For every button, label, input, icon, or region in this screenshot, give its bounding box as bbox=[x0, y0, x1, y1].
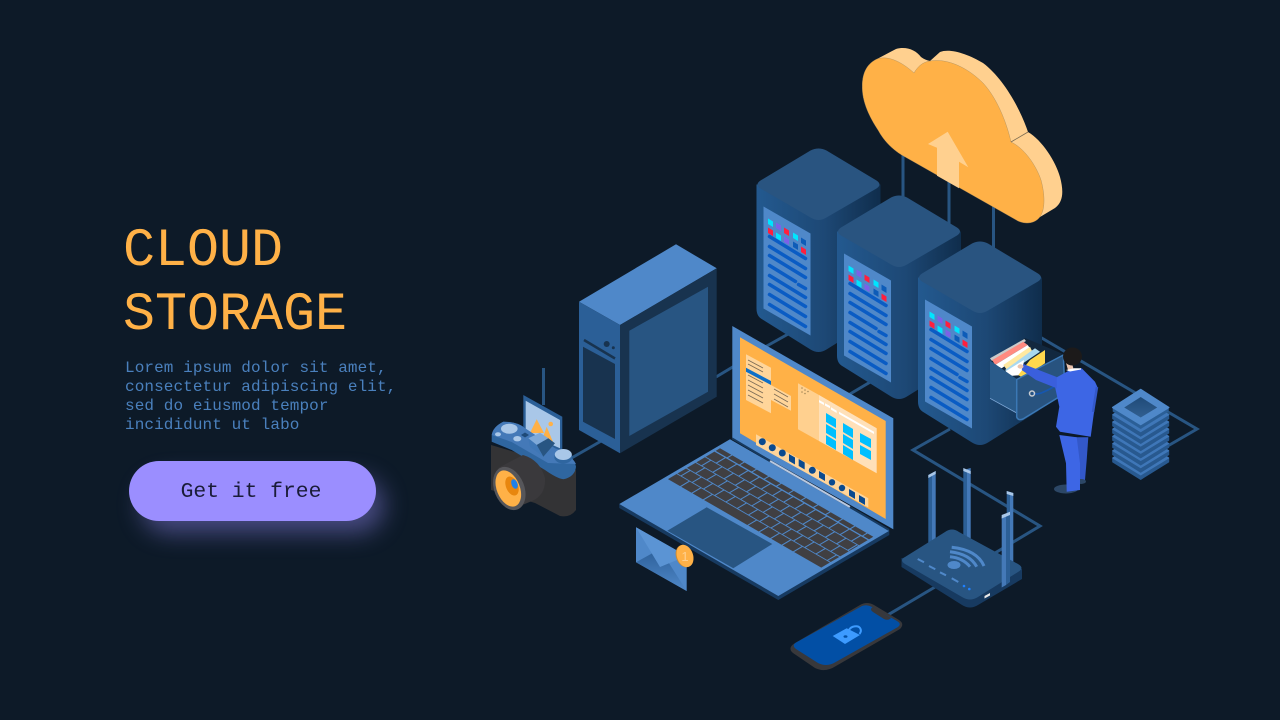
server rack 1 bbox=[756, 148, 880, 352]
camera with photo bbox=[487, 395, 576, 516]
router antenna front bbox=[1002, 512, 1010, 588]
smartphone with lock bbox=[790, 603, 902, 670]
file drawer bbox=[990, 338, 1065, 420]
wifi router bbox=[902, 468, 1022, 608]
lock icon bbox=[833, 626, 861, 644]
camera prism bbox=[528, 433, 555, 457]
call to action button bbox=[129, 461, 376, 521]
title: STORAGE bbox=[123, 286, 347, 346]
description text: consectetur adipiscing elit, bbox=[125, 378, 396, 396]
server rack 2 bbox=[837, 196, 961, 399]
laptop lid and screen bbox=[732, 326, 893, 529]
laptop base bbox=[619, 438, 889, 600]
keyboard bbox=[672, 450, 871, 565]
businessman bbox=[1018, 348, 1097, 494]
description text: sed do eiusmod tempor bbox=[125, 397, 329, 415]
desktop tower bbox=[579, 244, 717, 453]
call to action button: Get it free bbox=[181, 480, 321, 504]
description text bbox=[125, 358, 396, 434]
router antennas back bbox=[928, 468, 1013, 562]
connection lines bbox=[544, 150, 1197, 616]
disk stack bbox=[1113, 390, 1169, 479]
upload arrow bbox=[928, 132, 968, 188]
title: CLOUD bbox=[123, 222, 283, 282]
lens bbox=[487, 455, 545, 515]
description text: Lorem ipsum dolor sit amet, bbox=[125, 358, 387, 376]
description text: incididunt ut labo bbox=[125, 416, 299, 434]
server rack 3 bbox=[918, 242, 1042, 445]
envelope with notification badge bbox=[636, 527, 696, 591]
photo frame bbox=[523, 395, 562, 455]
laptop bbox=[619, 326, 893, 600]
cloud with upload arrow bbox=[862, 48, 1062, 223]
trackpad bbox=[667, 507, 772, 568]
dock bbox=[756, 434, 868, 508]
badge number: 1 bbox=[681, 549, 689, 564]
title bbox=[123, 222, 347, 346]
